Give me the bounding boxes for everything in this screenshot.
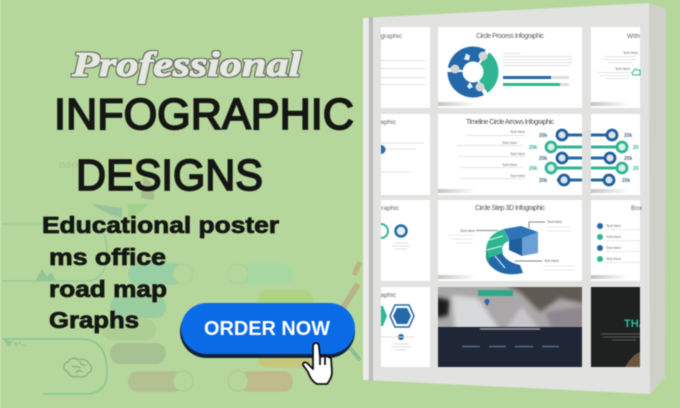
pills left bbox=[128, 263, 183, 285]
heading: Professional: Professional bbox=[71, 45, 301, 84]
timeline values: 20k bbox=[539, 156, 548, 162]
slide: timeline circle arrows infographic: Text Here bbox=[502, 141, 517, 145]
donut chart bbox=[450, 52, 491, 92]
timeline values: 20k bbox=[624, 133, 633, 139]
slide: circle step 3d infographic bbox=[438, 200, 582, 281]
book side edge bbox=[649, 3, 666, 394]
timeline values: 20k bbox=[529, 145, 538, 151]
slide column 3: Text Here bbox=[606, 257, 621, 261]
list: services: Educational poster bbox=[42, 212, 279, 238]
slide: timeline circle arrows infographic: Text Here bbox=[510, 152, 525, 156]
slide title: Circle Step 3D Infographic bbox=[475, 205, 546, 212]
slide: map photo contact bbox=[435, 282, 590, 367]
slide column 3: Text Here bbox=[615, 67, 630, 71]
slide column 3: Box bbox=[631, 205, 643, 212]
timeline arrows bbox=[545, 130, 628, 185]
banner bbox=[478, 290, 513, 296]
pills right bbox=[240, 263, 293, 285]
slide column 1: Infographic bbox=[370, 33, 403, 40]
slide title: Circle Process Infographic bbox=[476, 33, 544, 40]
chart labels bbox=[476, 222, 545, 261]
heading: INFOGRAPHIC: INFOGRAPHIC bbox=[54, 90, 354, 139]
faded background infographic bbox=[2, 152, 360, 394]
3d ring chart bbox=[486, 226, 538, 274]
slide: circle step 3d infographic: Text Here bbox=[460, 229, 475, 233]
slide: timeline circle arrows infographic bbox=[438, 114, 582, 195]
slide: circle step 3d infographic: Text Here bbox=[544, 259, 559, 263]
leaf shapes bbox=[123, 152, 145, 178]
slide column 3: Text Here bbox=[623, 51, 638, 55]
list: services: Graphs bbox=[49, 307, 139, 333]
timeline values: 20k bbox=[539, 178, 548, 184]
list: services: road map bbox=[49, 276, 167, 302]
faint label: INFO bbox=[59, 161, 78, 170]
slide: timeline circle arrows infographic: Text Here bbox=[510, 130, 525, 134]
slide column 3 bbox=[590, 26, 642, 368]
book front cover bbox=[363, 3, 650, 394]
icon: pointer hand bbox=[303, 343, 332, 384]
slide column 1 bbox=[380, 26, 430, 368]
diagonal road marks bbox=[338, 284, 358, 316]
timeline values bbox=[529, 133, 639, 184]
heading: DESIGNS: DESIGNS bbox=[76, 151, 263, 200]
button: order now bbox=[180, 303, 355, 358]
slide: timeline circle arrows infographic: Text Here bbox=[502, 163, 517, 167]
map pin bbox=[484, 299, 490, 306]
map photo bbox=[437, 286, 583, 328]
slide column 3: THANK bbox=[624, 318, 663, 330]
slide column 1: Infographic bbox=[364, 119, 397, 126]
slide: circle step 3d infographic: Text Here bbox=[547, 220, 562, 224]
list: services: ms office bbox=[49, 244, 166, 270]
icon: brain outline bbox=[64, 358, 92, 377]
timeline values: 20k bbox=[529, 166, 538, 172]
timeline values: 20k bbox=[622, 178, 631, 184]
list: services bbox=[42, 212, 279, 333]
slide column 3: With bbox=[627, 33, 640, 40]
slide column 1: Infographic bbox=[364, 292, 397, 299]
slide column 3: Text Here bbox=[606, 235, 621, 239]
button: order now: ORDER NOW bbox=[204, 318, 330, 340]
slide bottom fades bbox=[438, 102, 629, 279]
book spine strips bbox=[363, 17, 373, 381]
timeline values: 20 bbox=[633, 166, 639, 172]
slide: timeline circle arrows infographic: Text Here bbox=[510, 174, 525, 178]
timeline values: 20k bbox=[624, 156, 633, 162]
progress bars bbox=[503, 54, 573, 86]
slide: circle process infographic bbox=[438, 27, 582, 108]
slide column 3: Text Here bbox=[606, 246, 621, 250]
slide column 3: Text Here bbox=[606, 224, 621, 228]
slide title: Timeline Circle Arrows Infographic bbox=[466, 119, 554, 126]
timeline values: 20k bbox=[539, 133, 548, 139]
slide column 1: Infographic bbox=[367, 205, 400, 212]
text rows bbox=[457, 136, 525, 178]
timeline values: 20 bbox=[633, 145, 639, 151]
